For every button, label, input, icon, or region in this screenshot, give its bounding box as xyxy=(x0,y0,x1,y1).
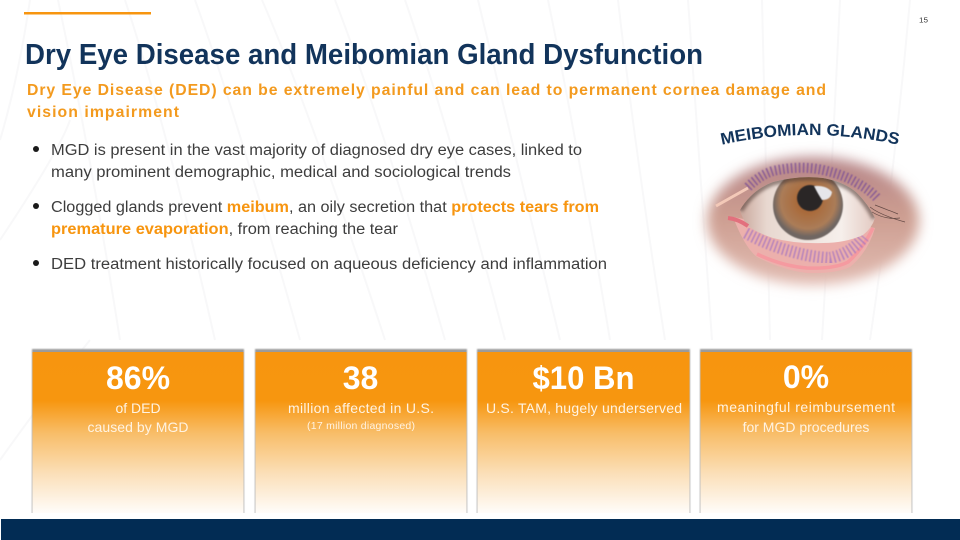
page number: 15 xyxy=(919,16,928,24)
subtitle: vision impairment xyxy=(27,104,180,121)
stat card: 86%: of DED xyxy=(115,400,161,416)
stat card: 0%: meaningful reimbursement xyxy=(717,399,895,415)
illustration: eye with meibomian glands xyxy=(707,157,919,285)
bullet: clogged glands: premature evaporation , from reaching the tear xyxy=(51,221,398,238)
bullet: MGD prevalence: MGD is present in the vast majority of diagnosed dry eye cases, linked to xyxy=(51,142,582,159)
stat card: 0% xyxy=(700,349,912,524)
bullet: clogged glands xyxy=(33,199,599,238)
bullet: MGD prevalence xyxy=(33,142,582,181)
stat card: 0%: for MGD procedures xyxy=(743,419,869,435)
bullet: MGD prevalence: many prominent demographic, medical and sociological trends xyxy=(51,164,511,181)
subtitle xyxy=(27,82,826,121)
stat card: 38 xyxy=(255,349,467,524)
accent line xyxy=(24,12,151,14)
title: Dry Eye Disease and Meibomian Gland Dysfunction xyxy=(25,39,703,71)
stat card: 86%: 86% xyxy=(106,360,170,396)
stat card: 38: (17 million diagnosed) xyxy=(307,420,415,432)
stat card: $10 Bn: $10 Bn xyxy=(532,360,634,396)
stat card: 38: 38 xyxy=(343,360,378,396)
bullet: treatment history: DED treatment historically focused on aqueous deficiency and inflammation xyxy=(51,256,607,273)
stat card: $10 Bn: U.S. TAM, hugely underserved xyxy=(486,400,682,416)
stat card: 38: million affected in U.S. xyxy=(288,400,434,416)
stat card: $10 Bn xyxy=(477,349,690,524)
bullet: clogged glands: Clogged glands prevent meibum, an oily secretion that protects tears from xyxy=(51,199,599,216)
stat card: 86%: caused by MGD xyxy=(88,419,188,435)
curved label: meibomian glands: MEIBOMIAN GLANDS xyxy=(720,124,899,144)
footer band xyxy=(1,519,960,540)
subtitle: Dry Eye Disease (DED) can be extremely painful and can lead to permanent cornea damage and xyxy=(27,82,826,99)
stat card: 86% xyxy=(32,349,244,524)
bullet list xyxy=(33,142,607,273)
stat card: 0%: 0% xyxy=(783,359,829,395)
